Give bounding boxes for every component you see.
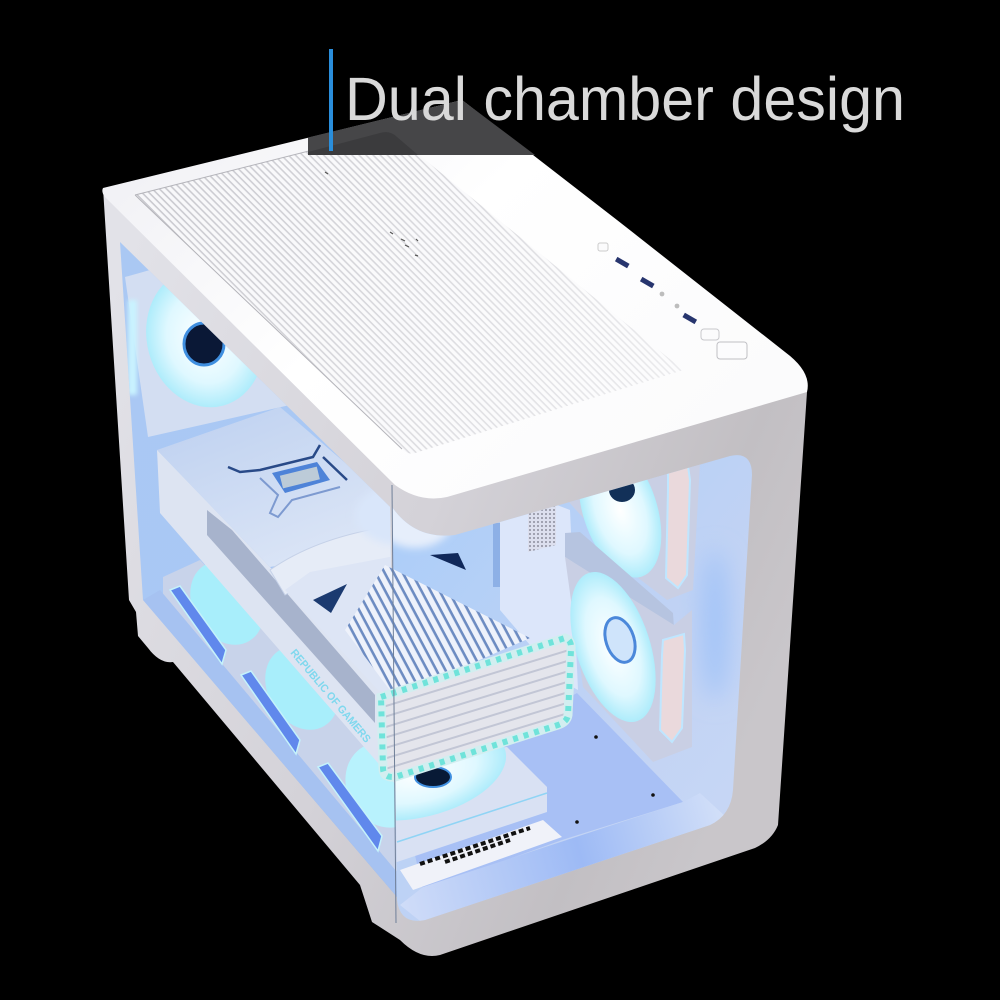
pc case bbox=[100, 49, 905, 956]
dark opening bbox=[430, 553, 466, 570]
title: Dual chamber design bbox=[345, 65, 905, 133]
dimmed vent corner bbox=[308, 132, 418, 155]
lower right fan bbox=[554, 532, 692, 762]
left glass chamber bbox=[120, 242, 397, 897]
side wall glow bbox=[701, 550, 729, 700]
rear mesh panel bbox=[528, 505, 556, 552]
vent top rim bbox=[135, 133, 402, 449]
case body frame bbox=[103, 188, 807, 956]
lower left fans bbox=[144, 560, 397, 896]
upper right fan bbox=[570, 465, 700, 600]
ribbed shroud bbox=[270, 531, 391, 596]
lower bracket bbox=[286, 557, 391, 688]
fan pad one bbox=[170, 586, 226, 664]
accent bar bbox=[329, 49, 333, 151]
top mesh vent bbox=[134, 132, 683, 454]
infographic canvas bbox=[102, 49, 902, 956]
lower fan pad bbox=[660, 634, 685, 742]
left pipe glow bbox=[362, 526, 390, 542]
glass seam bbox=[392, 485, 396, 923]
fan pad two bbox=[241, 671, 300, 754]
top panel bbox=[102, 100, 808, 498]
rear wall bracket bbox=[500, 505, 578, 690]
bottom fan bbox=[396, 747, 547, 862]
lower edge glow strip bbox=[143, 590, 397, 897]
chamber floor bbox=[400, 693, 683, 890]
socket bracket outline bbox=[228, 445, 347, 480]
pipe glow bbox=[392, 508, 451, 552]
front io ports bbox=[598, 243, 747, 359]
socket chip bbox=[272, 462, 330, 493]
upper fan pad bbox=[666, 466, 690, 588]
psu vent grille bbox=[400, 820, 562, 890]
right open chamber bbox=[392, 455, 752, 921]
graphics card backplate bbox=[157, 407, 400, 567]
gpu end block with lights bbox=[381, 638, 571, 777]
rear bracket shadow bbox=[493, 523, 500, 587]
upper left fan bbox=[125, 270, 286, 437]
floor lip bbox=[400, 793, 727, 925]
dark header overlay bbox=[308, 100, 535, 155]
floor screw holes bbox=[575, 735, 655, 824]
centre vent marks bbox=[325, 172, 418, 256]
fan pad three bbox=[318, 763, 382, 851]
bracket opening bbox=[313, 584, 347, 613]
graphics card side rail bbox=[157, 450, 400, 790]
heat sink fins bbox=[345, 565, 530, 697]
vent fade bbox=[134, 132, 683, 454]
republic of gamers lettering: REPUBLIC OF GAMERS bbox=[288, 647, 373, 745]
